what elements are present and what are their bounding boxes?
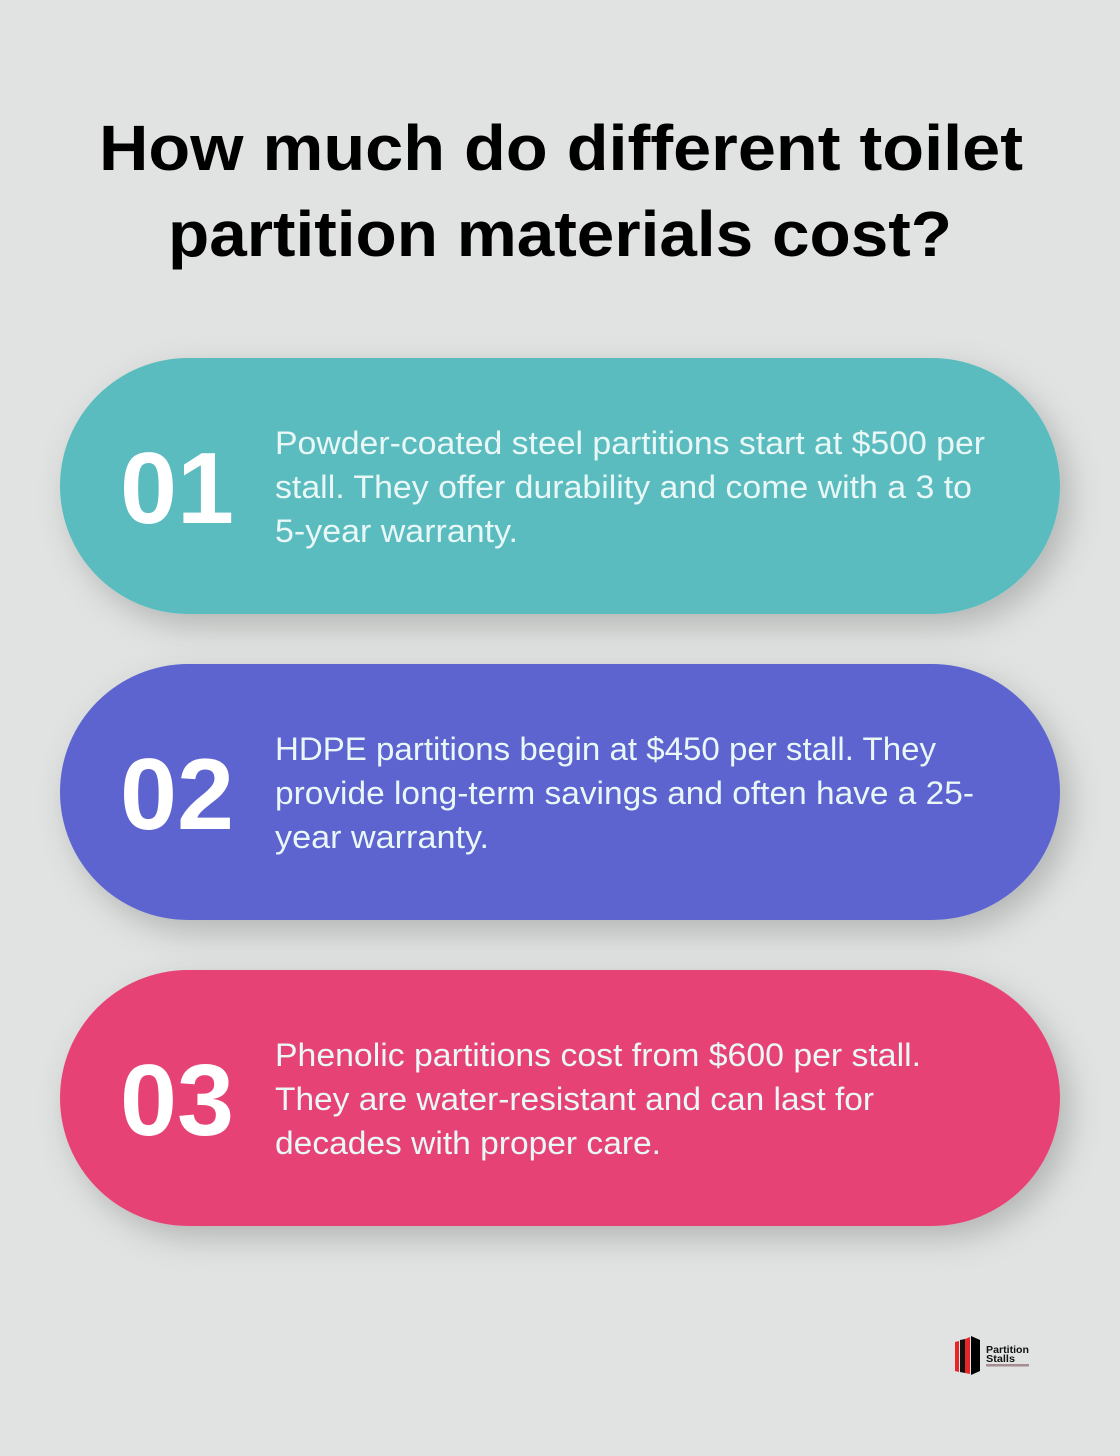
pill background pink [60, 970, 1060, 1226]
description 1: stall. They offer durability and come with a 3 to [275, 469, 972, 505]
title: partition materials cost? [168, 198, 952, 270]
panel: HDPE [60, 664, 1060, 920]
description 1: Powder-coated steel partitions start at $500 per [275, 425, 985, 461]
panel: powder-coated steel [60, 358, 1060, 614]
number 01: 01 [120, 433, 234, 545]
number 03: 03 [120, 1045, 234, 1157]
logo wordmark [986, 1345, 1029, 1366]
description 3: They are water-resistant and can last for [275, 1081, 874, 1117]
description 2 [275, 731, 974, 855]
description 1: 5-year warranty. [275, 513, 518, 549]
description 2: year warranty. [275, 819, 489, 855]
icon: partition panels [955, 1336, 980, 1375]
description 1 [275, 425, 985, 549]
description 3: decades with proper care. [275, 1125, 661, 1161]
pill background teal [60, 358, 1060, 614]
logo: Partition Stalls [955, 1336, 1029, 1375]
panel: phenolic [60, 970, 1060, 1226]
number 02: 02 [120, 739, 234, 851]
logo wordmark: Partition [986, 1345, 1029, 1356]
title [99, 112, 1023, 270]
title: How much do different toilet [99, 112, 1023, 184]
description 3 [275, 1037, 921, 1161]
description 2: HDPE partitions begin at $450 per stall. They [275, 731, 936, 767]
description 2: provide long-term savings and often have a 25- [275, 775, 974, 811]
logo wordmark: Stalls [986, 1354, 1015, 1365]
description 3: Phenolic partitions cost from $600 per stall. [275, 1037, 921, 1073]
pill background purple [60, 664, 1060, 920]
